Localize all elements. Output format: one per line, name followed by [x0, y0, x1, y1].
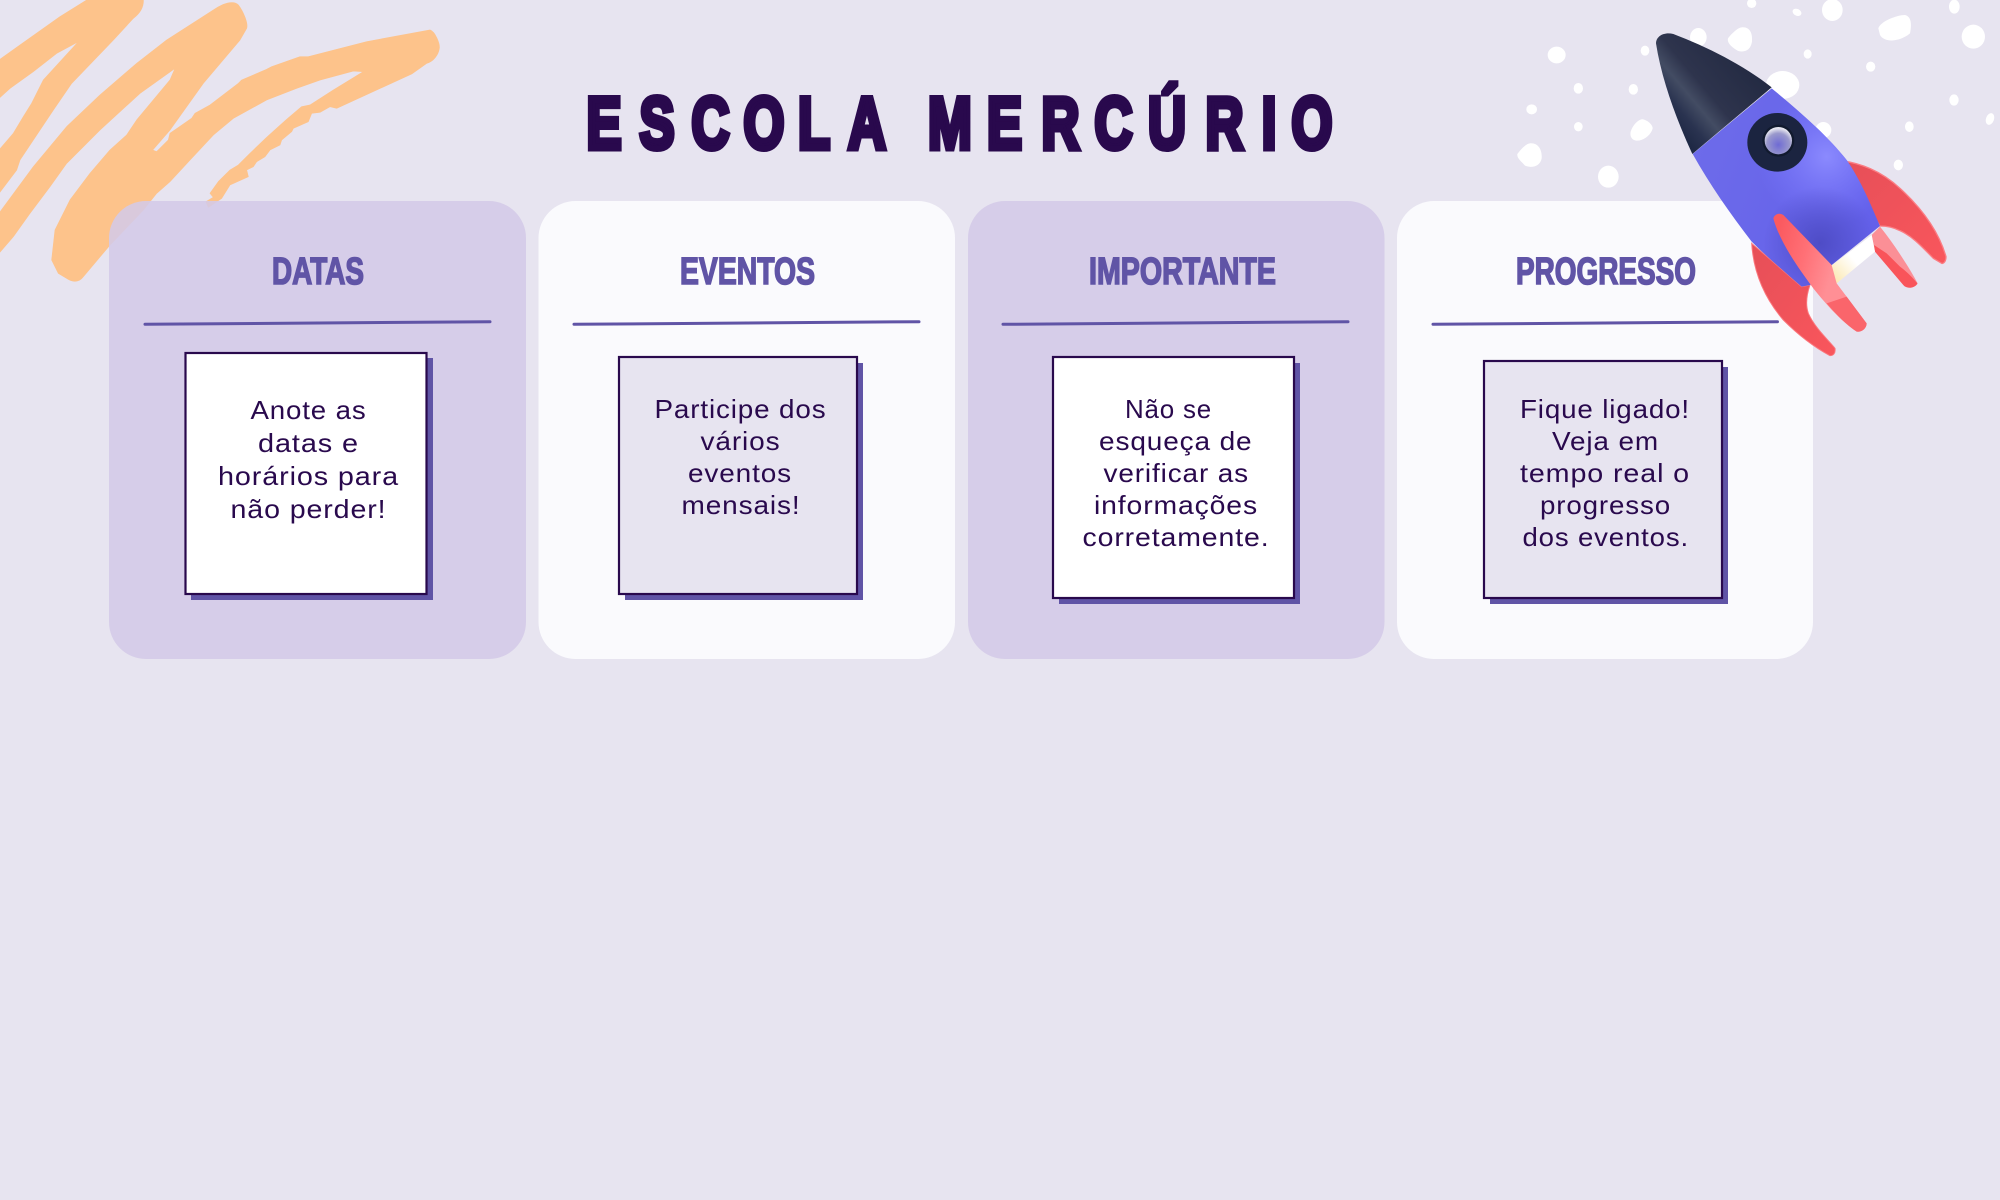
note: importante [1053, 357, 1300, 604]
rocket nose cone [1656, 33, 1772, 154]
rocket inner fin shade [1874, 245, 1917, 288]
note: importante: corretamente. [1082, 522, 1270, 552]
panel: importante [968, 201, 1384, 659]
note: progresso [1484, 361, 1728, 604]
rocket window [1747, 113, 1807, 172]
panel: eventos [538, 201, 955, 659]
rocket centre fin tip [1827, 297, 1867, 332]
rocket engine glow [1832, 235, 1875, 283]
note: importante: verificar as [1104, 458, 1249, 488]
rocket centre fin [1773, 214, 1867, 332]
note: importante: informações [1094, 490, 1258, 520]
panel: datas [109, 201, 526, 659]
note: datas: horários para [218, 461, 399, 491]
note: datas [186, 353, 433, 600]
note: eventos: Participe dos [654, 394, 826, 424]
note: eventos [619, 357, 863, 600]
note: datas: datas e [258, 428, 359, 458]
note: eventos: vários [700, 426, 780, 456]
title: ESCOLA MERCÚRIO [587, 83, 1332, 165]
heading: progresso: PROGRESSO [1516, 251, 1696, 293]
note: progresso: dos eventos. [1522, 522, 1689, 552]
note: datas: não perder! [230, 494, 386, 524]
rocket left fin [1752, 243, 1835, 356]
rocket right fin [1842, 161, 1946, 263]
rocket inner fin [1872, 227, 1918, 288]
decorative white dots [1517, 0, 1996, 188]
note: eventos: mensais! [682, 490, 800, 520]
note: eventos: eventos [688, 458, 792, 488]
note: progresso: Veja em [1552, 426, 1659, 456]
heading: eventos: EVENTOS [680, 251, 815, 293]
note: progresso: Fique ligado! [1520, 394, 1690, 424]
note: progresso: progresso [1540, 490, 1671, 520]
icon: rocket [1656, 33, 1946, 356]
note: importante: Não se [1125, 394, 1212, 424]
decorative orange brush strokes [0, 0, 439, 281]
rocket body [1693, 88, 1880, 287]
note: datas: Anote as [250, 395, 366, 425]
heading: importante: IMPORTANTE [1089, 251, 1276, 293]
heading: datas: DATAS [272, 251, 364, 293]
panel: progresso [1397, 201, 1813, 659]
note: progresso: tempo real o [1520, 458, 1690, 488]
note: importante: esqueça de [1099, 426, 1252, 456]
